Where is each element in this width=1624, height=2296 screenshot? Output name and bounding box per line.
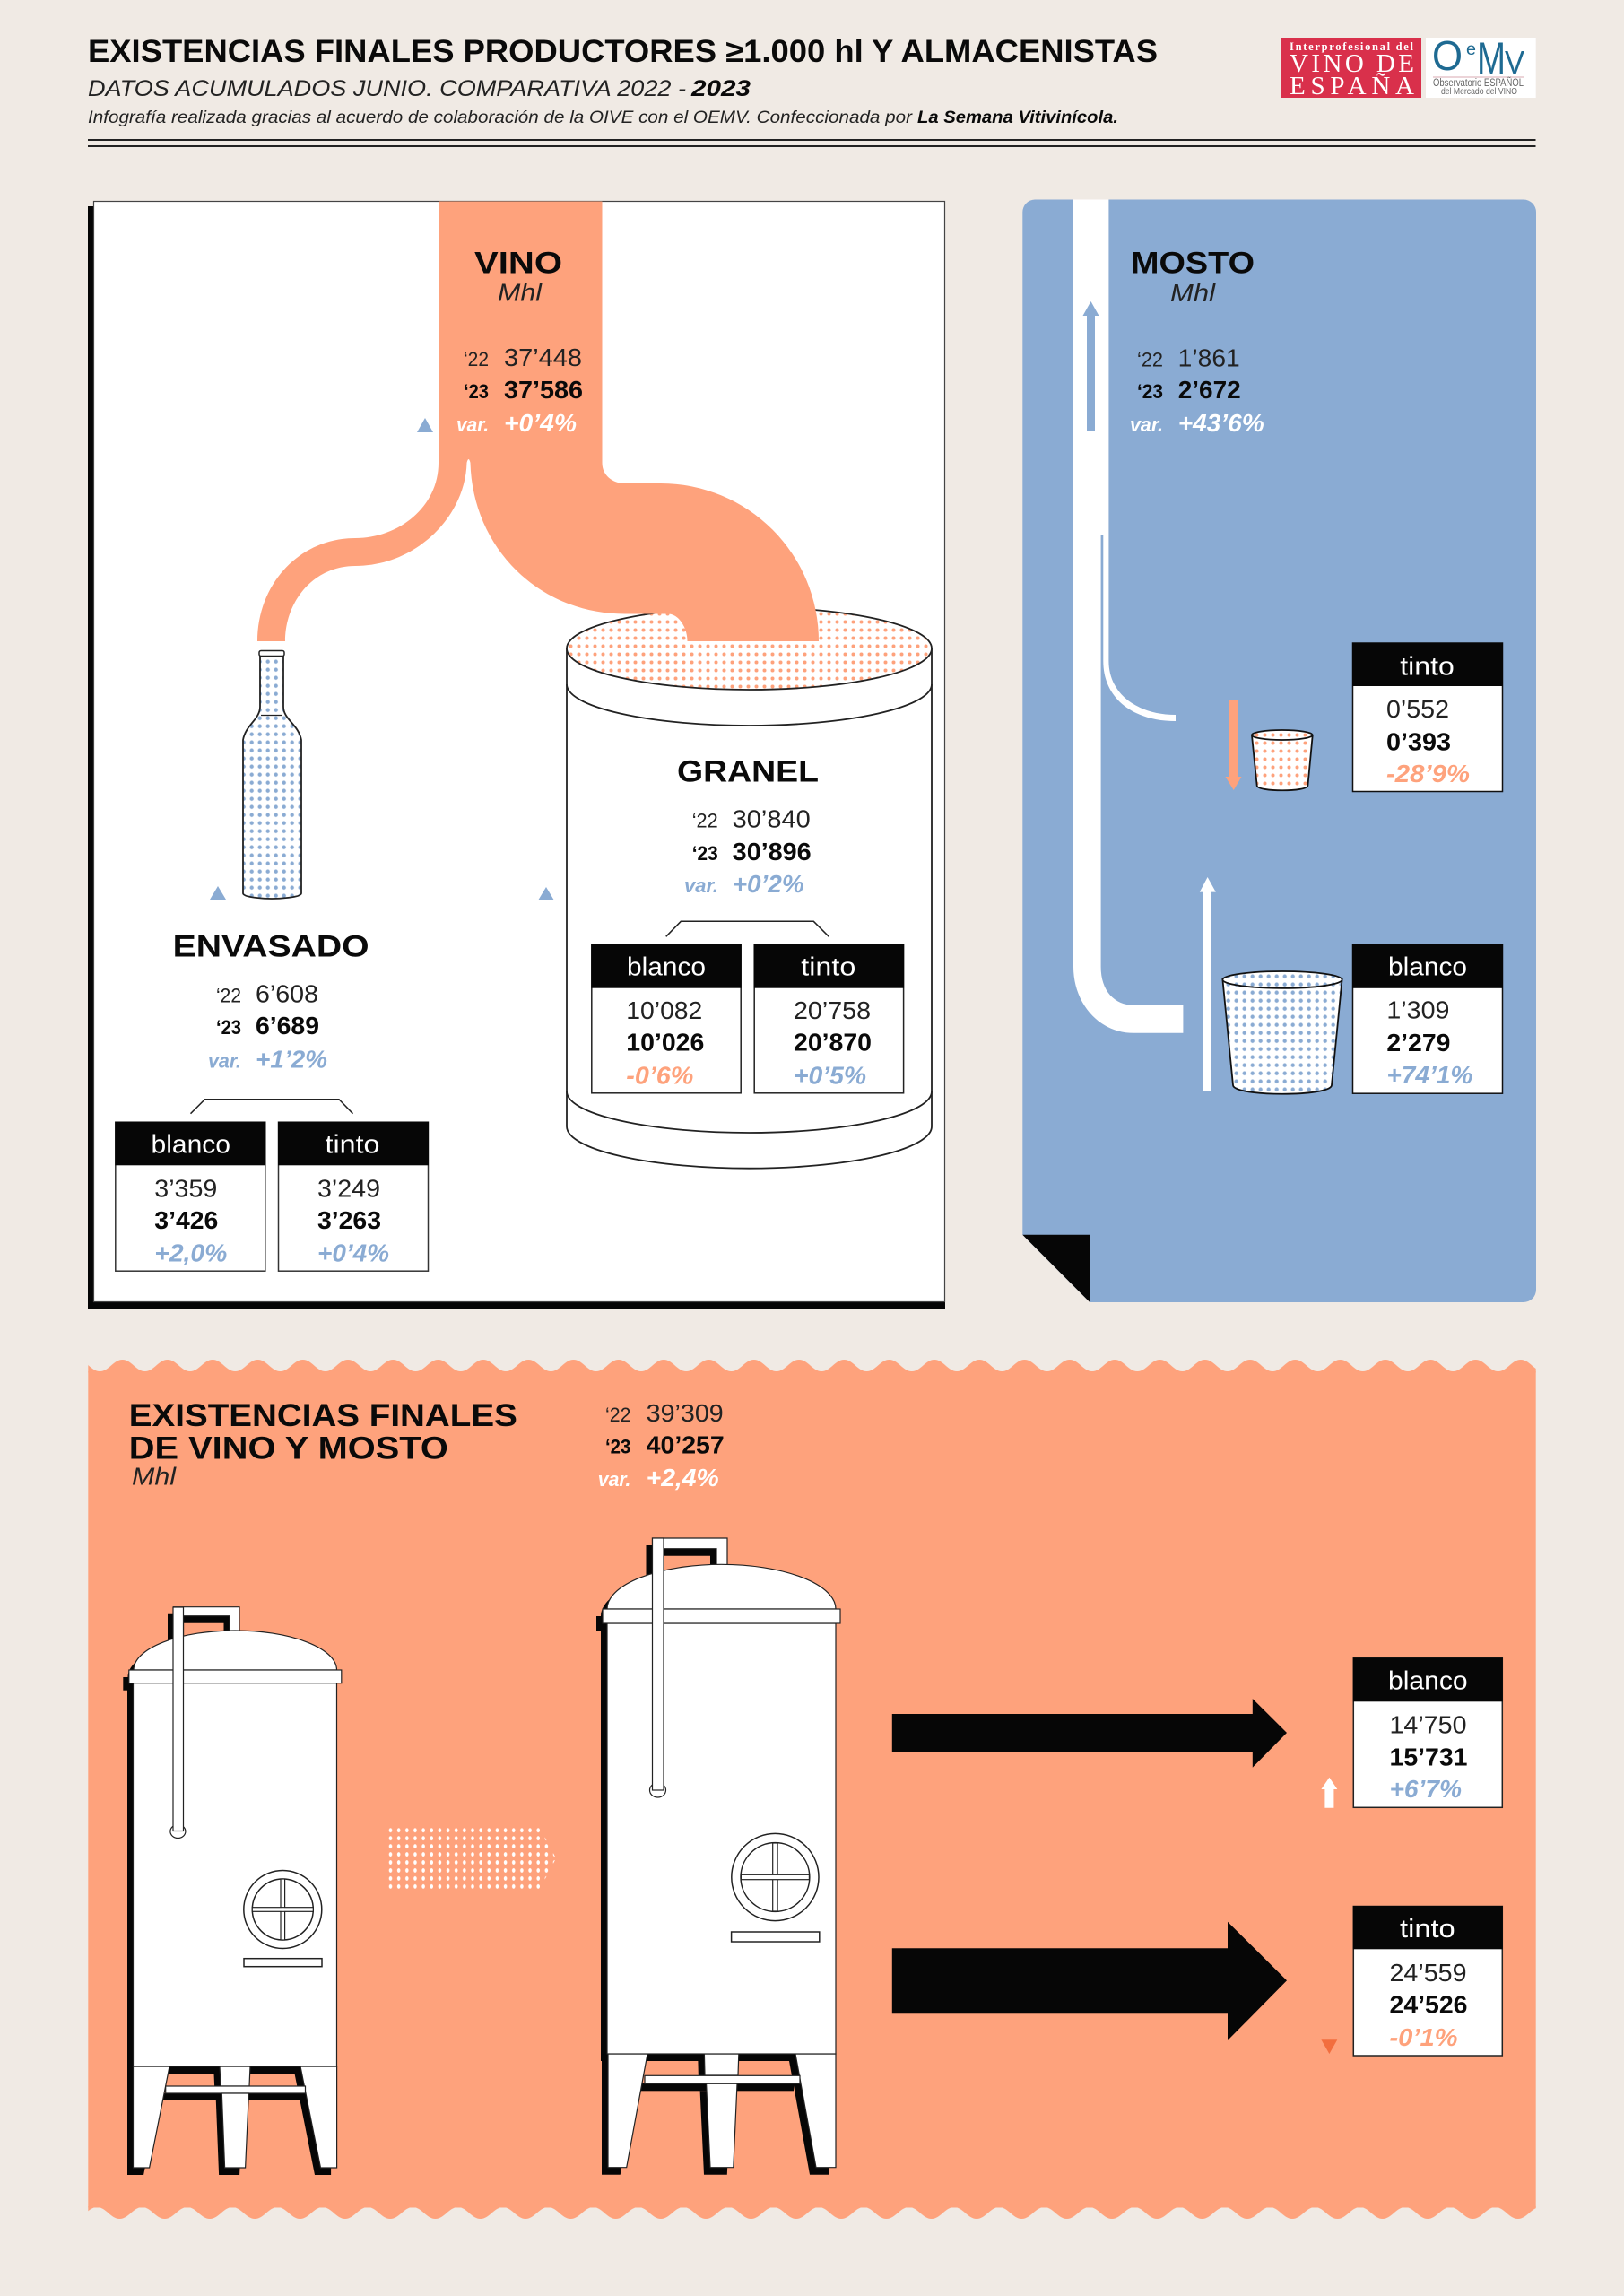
box: mosto blanco: blanco: [1388, 952, 1467, 981]
mosto heading: [1131, 247, 1255, 307]
dotted arrow between tanks: [386, 1826, 556, 1891]
box: envasado blanco: +2,0%: [154, 1239, 227, 1267]
envasado block: [115, 930, 429, 1271]
credits line: La Semana Vitivinícola.: [917, 108, 1118, 127]
box: envasado blanco: 3’359: [154, 1174, 217, 1202]
logo: OEMV: M: [1477, 33, 1506, 83]
arrow: mosto up: [1083, 301, 1099, 431]
logo: OEMV: Observatorio ESPAÑOL: [1433, 77, 1524, 89]
box: mosto tinto: tinto: [1400, 652, 1455, 681]
panel: mosto: [1022, 199, 1536, 1302]
vino stats: ‘22: [464, 348, 489, 370]
arrow: to blanco: [892, 1699, 1287, 1768]
box: envasado blanco: 3’426: [154, 1206, 218, 1234]
wavy salmon background: [88, 1360, 1536, 2219]
box: mosto tinto: [1352, 643, 1503, 791]
granel stats: var.: [684, 874, 718, 897]
box: envasado blanco: [115, 1122, 265, 1271]
mosto heading: MOSTO: [1131, 247, 1255, 281]
vino heading: Mhl: [498, 278, 543, 307]
box: total blanco: blanco: [1388, 1666, 1468, 1695]
box: granel tinto: [754, 944, 904, 1093]
arrow: blanco small up: [1321, 1778, 1337, 1808]
vino stats: 37’448: [504, 344, 582, 371]
header: [88, 32, 1536, 147]
mosto heading: Mhl: [1170, 279, 1216, 307]
box: envasado tinto: [278, 1122, 429, 1271]
credits line: Infografía realizada gracias al acuerdo de colaboración de la OIVE con el OEMV. Confeccionada por: [88, 108, 914, 127]
envasado heading: ENVASADO: [173, 930, 369, 964]
box: total tinto: tinto: [1400, 1915, 1455, 1944]
box: mosto blanco: [1352, 944, 1503, 1093]
box: granel tinto: 20’758: [794, 996, 871, 1024]
subtitle: DATOS ACUMULADOS JUNIO. COMPARATIVA 2022 -: [88, 76, 686, 101]
granel stats: 30’896: [733, 838, 812, 865]
box: envasado tinto: 3’249: [317, 1174, 380, 1202]
section stats: ‘23: [605, 1436, 630, 1458]
envasado stats: ‘23: [216, 1016, 241, 1039]
box: mosto blanco: 1’309: [1386, 996, 1449, 1024]
box: total tinto: [1353, 1906, 1503, 2056]
icon: small must cup: [1252, 730, 1313, 790]
box: granel blanco: [591, 944, 742, 1093]
section stats: var.: [598, 1468, 630, 1491]
mosto stats: ‘22: [1137, 349, 1163, 371]
box: envasado tinto: +0’4%: [317, 1239, 389, 1267]
vino stats: ‘23: [464, 380, 489, 403]
envasado stats: +1’2%: [256, 1046, 327, 1074]
arrow: to tinto: [892, 1922, 1287, 2040]
arrow: tinto down: [1225, 700, 1241, 790]
logo: OEMV: del Mercado del VINO: [1441, 86, 1517, 97]
granel stats: ‘23: [692, 842, 718, 865]
vino stats: 37’586: [504, 376, 583, 404]
box: mosto tinto: 0’552: [1386, 695, 1449, 723]
box: total tinto: -0’1%: [1390, 2023, 1458, 2051]
icon: tinto down triangle: [1321, 2039, 1337, 2054]
box: mosto tinto: -28’9%: [1386, 760, 1470, 787]
box: envasado tinto: 3’263: [317, 1206, 381, 1234]
section stats: [598, 1399, 725, 1492]
logo: Interprofesional del Vino de España: VINO DE: [1290, 49, 1414, 78]
box: total tinto: 24’526: [1390, 1990, 1467, 2018]
white must pipe: [1073, 199, 1183, 1033]
folded corner: [1022, 1235, 1090, 1302]
logo: OEMV: e: [1466, 40, 1476, 59]
section stats: 39’309: [647, 1399, 724, 1427]
box: granel blanco: 10’026: [626, 1029, 704, 1057]
icon: vino up triangle: [417, 418, 433, 432]
mosto stats: var.: [1130, 413, 1163, 436]
vino heading: [474, 246, 562, 307]
wine pipe flow: [257, 201, 819, 641]
logo: Interprofesional del Vino de España: [1281, 38, 1421, 100]
logo: OEMV: V: [1505, 44, 1524, 81]
box: mosto tinto: 0’393: [1386, 727, 1451, 755]
vino stats: var.: [456, 413, 489, 436]
panel: vino: [88, 201, 945, 1309]
section stats: +2,4%: [647, 1464, 719, 1492]
granel block: [591, 755, 904, 1093]
logo: OEMV: O: [1432, 32, 1463, 79]
mosto stats: 1’861: [1178, 344, 1240, 372]
mosto stats: 2’672: [1178, 376, 1241, 404]
granel heading: GRANEL: [677, 755, 819, 789]
section heading: EXISTENCIAS FINALES: [129, 1398, 517, 1433]
vino stats: +0’4%: [504, 409, 577, 437]
section stats: ‘22: [605, 1404, 630, 1426]
box: total tinto: 24’559: [1390, 1959, 1467, 1987]
logo: OEMV: [1426, 32, 1536, 98]
box: total blanco: [1353, 1657, 1503, 1807]
section stats: 40’257: [647, 1431, 725, 1459]
mosto stats: ‘23: [1137, 380, 1163, 403]
box: granel tinto: +0’5%: [794, 1061, 866, 1089]
logo: Interprofesional del Vino de España: ESPAÑA: [1290, 72, 1414, 100]
granel stats: ‘22: [692, 809, 718, 831]
envasado stats: 6’689: [256, 1012, 319, 1039]
granel tank illustration: [567, 607, 932, 1169]
box: envasado tinto: tinto: [325, 1131, 380, 1160]
box: total blanco: 14’750: [1390, 1710, 1467, 1738]
granel stats: +0’2%: [733, 870, 804, 898]
envasado stats: ‘22: [216, 985, 241, 1007]
logo: Interprofesional del Vino de España: Interprofesional del: [1290, 40, 1414, 53]
box: granel blanco: 10’082: [626, 996, 702, 1024]
section heading: [129, 1398, 517, 1491]
subtitle: 2023: [690, 76, 751, 101]
box: granel blanco: -0’6%: [626, 1061, 693, 1089]
icon: envasado up triangle: [210, 886, 226, 900]
box: granel tinto: tinto: [801, 952, 855, 981]
title: EXISTENCIAS FINALES PRODUCTORES ≥1.000 hl Y ALMACENISTAS: [88, 34, 1158, 69]
section heading: DE VINO Y MOSTO: [129, 1431, 448, 1466]
vino stats: [456, 344, 583, 437]
arrow: blanco up: [1200, 877, 1216, 1091]
mosto stats: [1130, 344, 1264, 437]
section heading: Mhl: [132, 1463, 177, 1491]
box: granel blanco: blanco: [627, 952, 706, 981]
icon: bottle: [243, 651, 301, 899]
envasado stats: 6’608: [256, 980, 318, 1008]
box: granel tinto: 20’870: [794, 1029, 872, 1057]
mosto stats: +43’6%: [1178, 409, 1264, 437]
envasado stats: [208, 980, 327, 1074]
panel: existencias finales de vino y mosto: [88, 1360, 1536, 2219]
box: mosto blanco: 2’279: [1386, 1029, 1450, 1057]
box: mosto blanco: +74’1%: [1386, 1061, 1472, 1089]
box: total blanco: +6’7%: [1390, 1775, 1462, 1803]
icon: big must cup: [1222, 971, 1342, 1094]
icon: granel up triangle: [538, 887, 554, 900]
box: envasado blanco: blanco: [151, 1131, 230, 1160]
box: total blanco: 15’731: [1390, 1743, 1467, 1770]
envasado stats: var.: [208, 1050, 241, 1073]
big tank 2023: [596, 1538, 840, 2175]
vino heading: VINO: [474, 246, 562, 280]
granel stats: 30’840: [733, 804, 811, 832]
small tank 2022: [123, 1607, 342, 2175]
granel stats: [684, 804, 812, 898]
